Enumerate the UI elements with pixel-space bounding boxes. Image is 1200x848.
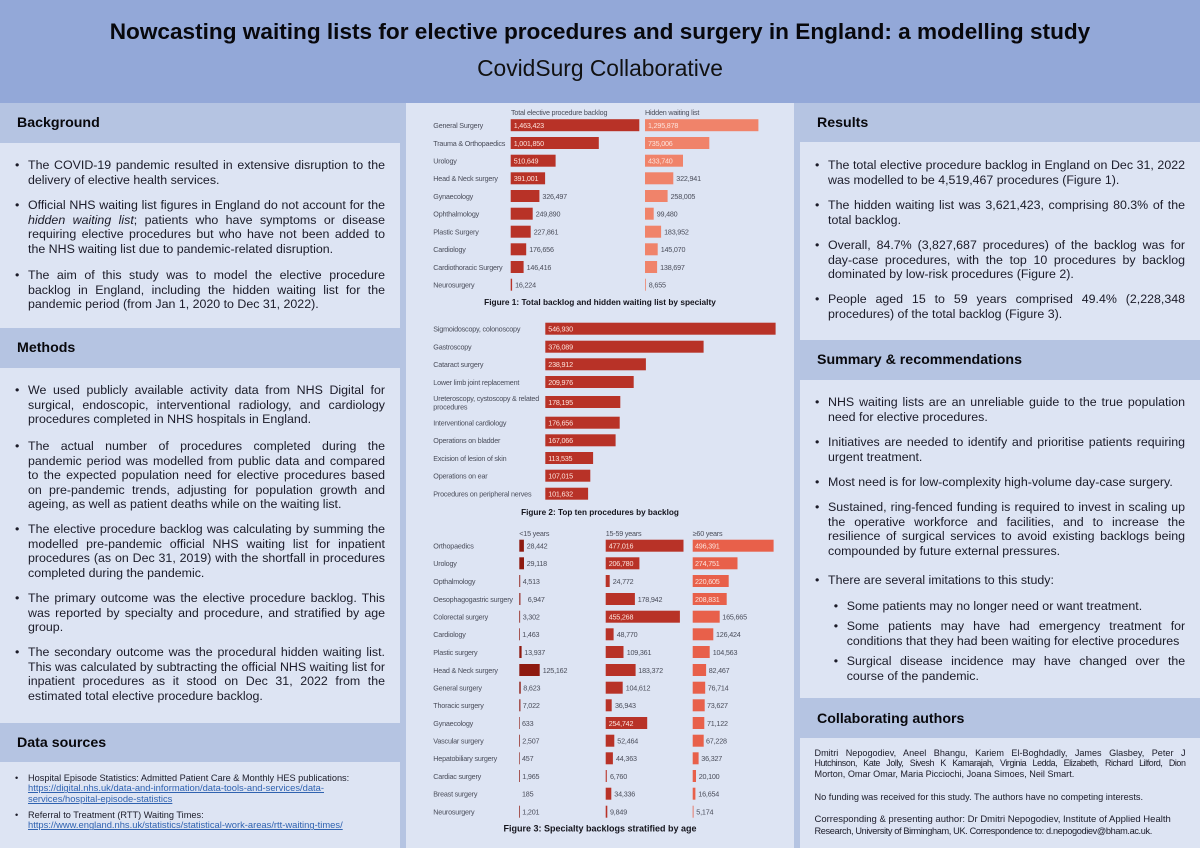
panel: Collaborating authors bbox=[800, 738, 1200, 848]
row: Gynaecology: Gynaecology bbox=[433, 719, 474, 728]
row: Ophthalmology: 99,480 bbox=[657, 210, 678, 218]
row: Cataract surgery: Cataract surgery bbox=[433, 360, 484, 369]
row: Operations on ear bbox=[433, 470, 590, 482]
row: Gynaecology: 258,005 bbox=[671, 192, 695, 201]
bullet: aim bbox=[28, 268, 385, 312]
row: Cardiac surgery: 1,965 bbox=[522, 772, 539, 781]
bullet: unreliable guide: need for elective procedures. bbox=[828, 410, 988, 424]
correspondence: Research, University of Birmingham, UK. Correspondence to: d.nepogodiev@bham.ac.uk. bbox=[814, 826, 1152, 836]
sub-bullet: emergency treatment bbox=[847, 619, 1185, 648]
bullet: backlog calculation: completed during the pandemic. bbox=[28, 566, 204, 580]
row: Operations on bladder: 167,066 bbox=[548, 436, 573, 445]
row: Procedures on peripheral nerves bbox=[433, 488, 588, 500]
row: Neurosurgery: 9,849 bbox=[610, 808, 627, 816]
row: Lower limb joint replacement bbox=[433, 376, 634, 388]
source: HES: https://digital.nhs.uk/data-and-information/data-tools-and-services/data- bbox=[28, 782, 324, 793]
bullet: primary outcome bbox=[28, 591, 385, 635]
row: Colorectal surgery: Colorectal surgery bbox=[433, 612, 489, 622]
bullet: day-case: dominated by low-risk procedures (Figure 2). bbox=[828, 267, 1074, 281]
bullet: backlog calculation: procedures (as on Dec 31, 2019) with the shortfall in procedures bbox=[28, 551, 385, 565]
Figure 1 chart: Hidden waiting list bbox=[645, 108, 699, 117]
sub-bullet: incidence bbox=[847, 654, 1185, 683]
row: General surgery: 104,612 bbox=[626, 684, 650, 692]
row: Gastroscopy bbox=[433, 341, 704, 353]
heading: Background: Background bbox=[17, 115, 100, 131]
panel: Summary & recommendations bbox=[800, 380, 1200, 698]
caption: Figure 3: Figure 3: Specialty backlogs stratified by age bbox=[503, 824, 697, 834]
row: Plastic Surgery: 227,861 bbox=[534, 228, 558, 236]
row: Opthalmology bbox=[433, 575, 729, 587]
subtitle: CovidSurg Collaborative bbox=[477, 55, 723, 81]
row: Operations on bladder bbox=[433, 434, 616, 446]
bullet: secondary outcome bbox=[28, 645, 385, 703]
row: Cardiology bbox=[433, 243, 685, 255]
row: Urology: 29,118 bbox=[527, 559, 547, 568]
row: Hepatobiliary surgery: Hepatobiliary surgery bbox=[433, 754, 498, 763]
row: Cardiology: Cardiology bbox=[433, 630, 466, 639]
row: Thoracic surgery: 36,943 bbox=[615, 701, 636, 710]
row: Cataract surgery bbox=[433, 358, 646, 370]
row: Gastroscopy: Gastroscopy bbox=[433, 342, 472, 352]
row: Cardiac surgery: 6,760 bbox=[610, 772, 627, 781]
row: Trauma & Orthopaedics: 1,001,850 bbox=[514, 139, 544, 148]
row: General surgery: 76,714 bbox=[708, 684, 729, 692]
bullet: data: We used publicly available activity data from NHS Digital for bbox=[28, 383, 385, 397]
row: Orthopaedics: 28,442 bbox=[527, 542, 548, 550]
row: Oesophagogastric surgery: 6,947 bbox=[528, 595, 545, 604]
row: Operations on ear: Operations on ear bbox=[433, 472, 488, 480]
row: Sigmoidoscopy: 546,930 bbox=[548, 324, 573, 334]
Figure 3 chart: <15 years bbox=[519, 529, 550, 538]
row: Procedures on peripheral nerves: Procedures on peripheral nerves bbox=[433, 490, 532, 498]
row: Ureteroscopy: 178,195 bbox=[548, 398, 573, 407]
row: Orthopaedics: 496,391 bbox=[695, 542, 720, 550]
bullet: hidden list bbox=[828, 198, 1185, 227]
row: Head & Neck surgery: 183,372 bbox=[638, 666, 663, 675]
row: Neurosurgery: 16,224 bbox=[515, 280, 536, 290]
sub-bullet: no longer need: Some patients may no longer need or want treatment. bbox=[847, 599, 1142, 613]
row: Urology: 510,649 bbox=[514, 156, 538, 166]
bullet: primary outcome: The primary outcome was the elective procedure backlog. This bbox=[28, 591, 385, 605]
bullet: hidden list: The hidden waiting list was 3,621,423, comprising 80.3% of the bbox=[828, 198, 1185, 212]
row: Operations on ear: 107,015 bbox=[548, 472, 573, 480]
row: Cardiology: 48,770 bbox=[617, 630, 638, 639]
row: Excision of lesion of skin bbox=[433, 452, 593, 464]
bullet: funding: Sustained, ring-fenced funding is required to invest in scaling up bbox=[828, 500, 1185, 514]
panel: Background bbox=[0, 143, 400, 328]
bullet: age: People aged 15 to 59 years comprised 49.4% (2,228,348 bbox=[828, 292, 1185, 306]
bullet: unreliable guide bbox=[828, 395, 1185, 424]
row: General surgery: 8,623 bbox=[523, 684, 540, 692]
row: Head & Neck surgery: Head & Neck surgery bbox=[433, 174, 498, 183]
row: Urology: Urology bbox=[433, 559, 457, 568]
row: Plastic surgery: 104,563 bbox=[713, 648, 737, 657]
row: Head & Neck surgery: Head & Neck surgery bbox=[433, 666, 498, 675]
row: Gynaecology bbox=[433, 717, 728, 729]
bullet: funding: the operative workforce and facilities, and to increase the bbox=[828, 515, 1185, 529]
row: Lower limb joint replacement: 209,976 bbox=[548, 378, 573, 387]
row: Cataract surgery: 238,912 bbox=[548, 360, 573, 369]
row: Interventional cardiology bbox=[433, 417, 620, 429]
row: Cardiology: 145,070 bbox=[661, 245, 685, 254]
heading: Methods: Methods bbox=[17, 340, 75, 356]
row: General Surgery: General Surgery bbox=[433, 121, 484, 130]
row: Opthalmology: 24,772 bbox=[613, 577, 634, 586]
bullet: modelling: to the expected population need for elective procedures based bbox=[28, 468, 385, 482]
caption: Figure 1: Figure 1: Total backlog and hidden waiting list by specialty bbox=[484, 297, 716, 307]
row: Plastic surgery bbox=[433, 646, 737, 658]
row: Sigmoidoscopy bbox=[433, 323, 776, 335]
Figure 3 chart: ≥60 years bbox=[693, 529, 723, 538]
bullet: data: surgical, endoscopic, interventional radiology, and cardiology bbox=[28, 398, 385, 412]
row: Breast surgery: 34,336 bbox=[614, 790, 635, 798]
bullet: aim: pandemic period (from Jan 1, 2020 to Dec 31, 2022). bbox=[28, 297, 319, 311]
bullet: backlog calculation: modelled pre-pandemic official NHS waiting list for inpatient bbox=[28, 537, 385, 551]
bullet: modelling: The actual number of procedures completed during the bbox=[28, 439, 385, 453]
bullet: funding: resilience of surgical services to avoid existing backlogs being bbox=[828, 529, 1185, 543]
row: Gynaecology: 326,497 bbox=[542, 192, 567, 201]
row: Urology bbox=[433, 155, 683, 167]
row: Cardiothoracic Surgery: 146,416 bbox=[527, 263, 551, 272]
author list: Dmitri Nepogodiev, Aneel Bhangu, Kariem El-Boghdadly, James Glasbey, Peter J bbox=[814, 748, 1186, 758]
row: Breast surgery: 16,654 bbox=[698, 790, 719, 798]
bullet: hidden waiting list: hidden waiting list; patients who have symptoms or disease bbox=[28, 213, 385, 227]
row: Ophthalmology: Ophthalmology bbox=[433, 210, 480, 218]
author list: Hutchinson, Kate Jolly, Sivesh K Kamarajah, Virginia Ledda, Elizabeth, Richard Lilford, Dion bbox=[814, 758, 1186, 768]
row: Head & Neck surgery: 82,467 bbox=[709, 666, 730, 675]
row: Urology: 433,740 bbox=[648, 156, 673, 166]
bullet: initiatives: Initiatives are needed to identify and prioritise patients requiring bbox=[828, 435, 1185, 449]
row: Hepatobiliary surgery bbox=[433, 752, 722, 764]
row: Plastic Surgery: Plastic Surgery bbox=[433, 228, 479, 236]
bullet: age: procedures) of the total backlog (Figure 3). bbox=[828, 307, 1062, 321]
heading: Data sources: Data sources bbox=[17, 735, 106, 751]
row: Plastic surgery: Plastic surgery bbox=[433, 648, 478, 657]
row: Excision of lesion of skin: Excision of lesion of skin bbox=[433, 454, 507, 463]
heading: Results: Results bbox=[817, 115, 868, 131]
bullet: total backlog: was modelled to be 4,519,467 procedures (Figure 1). bbox=[828, 173, 1119, 187]
panel: Results bbox=[800, 142, 1200, 340]
bullet: funding: compounded by future external pressures. bbox=[828, 544, 1060, 558]
row: Vascular surgery: 2,507 bbox=[522, 736, 539, 746]
Figure 2 chart bbox=[433, 323, 776, 517]
bullet: modelling: ageing, as well as patient deaths while on the waiting list. bbox=[28, 497, 341, 511]
row: Plastic surgery: 109,361 bbox=[627, 648, 651, 657]
row: Vascular surgery: Vascular surgery bbox=[433, 736, 484, 746]
bullet: day-case bbox=[828, 238, 1185, 282]
bullet: modelling: pandemic period was modelled from public data and compared bbox=[28, 454, 385, 468]
row: Neurosurgery bbox=[433, 279, 666, 291]
row: Thoracic surgery bbox=[433, 699, 728, 711]
bullet: disruption: delivery of elective health services. bbox=[28, 173, 219, 187]
bullet: hidden waiting list: requiring elective procedures but who have not been added to bbox=[28, 227, 385, 241]
bullet: hidden list: total backlog. bbox=[828, 213, 901, 227]
row: Colorectal surgery bbox=[433, 611, 747, 623]
row: Neurosurgery: 1,201 bbox=[522, 808, 539, 816]
correspondence bbox=[814, 814, 1171, 836]
row: Breast surgery: 185 bbox=[522, 790, 534, 798]
row: Neurosurgery: Neurosurgery bbox=[433, 808, 475, 816]
row: Thoracic surgery: 7,022 bbox=[523, 701, 540, 710]
row: Operations on bladder: Operations on bladder bbox=[433, 436, 501, 445]
row: Urology: Urology bbox=[433, 156, 457, 166]
row: Colorectal surgery: 3,302 bbox=[523, 612, 540, 622]
bullet: initiatives bbox=[828, 435, 1185, 464]
row: Urology bbox=[433, 557, 738, 569]
bullet: hidden waiting list: Official NHS waiting list figures in England do not account for the bbox=[28, 198, 385, 212]
row: General Surgery bbox=[433, 119, 758, 131]
bullet: primary outcome: group. bbox=[28, 620, 63, 634]
row: Neurosurgery: 8,655 bbox=[649, 280, 666, 290]
row: Cardiology bbox=[433, 628, 741, 640]
row: Orthopaedics: Orthopaedics bbox=[433, 542, 474, 550]
row: Gynaecology bbox=[433, 190, 695, 202]
row: Neurosurgery: Neurosurgery bbox=[433, 280, 475, 290]
row: General Surgery: 1,463,423 bbox=[514, 121, 544, 130]
row: Head & Neck surgery bbox=[433, 172, 701, 184]
bullet: modelling: on pre-pandemic trends, adjusting for population growth and bbox=[28, 483, 385, 497]
row: Plastic surgery: 13,937 bbox=[524, 648, 545, 657]
bullet: secondary outcome: This was calculated by subtracting the official NHS waiting list for bbox=[28, 660, 385, 674]
Figure 1 chart bbox=[433, 108, 758, 307]
funding statement: No funding was received for this study. The authors have no competing interests. bbox=[814, 792, 1143, 802]
row: Oesophagogastric surgery: 208,831 bbox=[695, 595, 720, 604]
row: Ureteroscopy bbox=[433, 394, 620, 411]
row: Vascular surgery bbox=[433, 735, 727, 747]
row: Opthalmology: Opthalmology bbox=[433, 577, 476, 586]
row: Trauma & Orthopaedics: Trauma & Orthopaedics bbox=[433, 139, 506, 148]
Figure 3 chart bbox=[433, 529, 774, 834]
source: RTT: Referral to Treatment (RTT) Waiting Times: bbox=[28, 810, 204, 820]
row: Gynaecology: 71,122 bbox=[707, 719, 728, 728]
bullet: disruption bbox=[28, 158, 385, 187]
row: Lower limb joint replacement: Lower limb joint replacement bbox=[433, 378, 519, 387]
row: General Surgery: 1,295,878 bbox=[648, 121, 678, 130]
row: Gastroscopy: 376,089 bbox=[548, 342, 573, 352]
bullet: secondary outcome: The secondary outcome was the procedural hidden waiting list. bbox=[28, 645, 385, 659]
row: Cardiothoracic Surgery: 138,697 bbox=[660, 263, 685, 272]
source: RTT: https://www.england.nhs.uk/statistics/statistical-work-areas/rtt-waiting-times/ bbox=[28, 819, 343, 830]
row: Interventional cardiology: Interventional cardiology bbox=[433, 418, 507, 428]
row: Neurosurgery bbox=[433, 806, 713, 818]
bullet: funding bbox=[828, 500, 1185, 558]
row: Orthopaedics: 477,016 bbox=[609, 542, 633, 550]
row: Plastic Surgery bbox=[433, 226, 689, 238]
author list: Morton, Omar Omar, Maria Picciochi, Joana Simoes, Neil Smart. bbox=[814, 768, 1074, 778]
sub-bullet: emergency treatment: conditions that they had been waiting for elective procedures bbox=[847, 634, 1179, 648]
bullet: aim: The aim of this study was to model the elective procedure bbox=[28, 268, 385, 282]
row: Ureteroscopy: Ureteroscopy, cystoscopy & related bbox=[433, 394, 539, 403]
row: Opthalmology: 4,513 bbox=[523, 577, 540, 586]
sub-bullet: emergency treatment: Some patients may have had emergency treatment for bbox=[847, 619, 1185, 633]
row: General surgery: General surgery bbox=[433, 684, 482, 692]
source: HES: services/hospital-episode-statistics bbox=[28, 793, 172, 804]
row: Head & Neck surgery bbox=[433, 664, 730, 676]
bullet: secondary outcome: estimated total elective procedure backlog. bbox=[28, 689, 263, 703]
row: Sigmoidoscopy: Sigmoidoscopy, colonoscopy bbox=[433, 324, 521, 334]
row: Oesophagogastric surgery: 178,942 bbox=[638, 595, 662, 604]
header band bbox=[0, 0, 1200, 103]
row: Interventional cardiology: 176,656 bbox=[548, 418, 573, 428]
bullet: age bbox=[828, 292, 1185, 321]
bullet: data: procedures completed in NHS hospitals in England. bbox=[28, 412, 311, 426]
row: Thoracic surgery: 73,627 bbox=[707, 701, 728, 710]
bullet: aim: backlog in England, including the hidden waiting list for the bbox=[28, 283, 385, 297]
row: Gynaecology: 254,742 bbox=[609, 719, 633, 728]
row: Orthopaedics bbox=[433, 540, 774, 552]
panel: Methods bbox=[0, 368, 400, 723]
row: Head & Neck surgery: 322,941 bbox=[676, 174, 701, 183]
row: Breast surgery bbox=[433, 788, 719, 800]
row: Hepatobiliary surgery: 36,327 bbox=[701, 754, 722, 763]
sub-bullet: incidence: course of the pandemic. bbox=[847, 669, 979, 683]
caption: Figure 2: Figure 2: Top ten procedures by backlog bbox=[521, 508, 679, 517]
row: Opthalmology: 220,605 bbox=[695, 577, 720, 586]
row: Cardiac surgery: Cardiac surgery bbox=[433, 772, 482, 781]
bullet: backlog calculation bbox=[28, 522, 385, 580]
bullet: secondary outcome: inpatient procedures as it stood on Dec 31, 2022 from the bbox=[28, 674, 385, 688]
row: Cardiology: 176,656 bbox=[529, 245, 554, 254]
panel: Data sources: • bbox=[15, 810, 18, 820]
row: Cardiothoracic Surgery bbox=[433, 261, 685, 273]
bullet: modelling bbox=[28, 439, 385, 512]
panel: Data sources: • bbox=[15, 772, 18, 782]
row: Plastic Surgery: 183,952 bbox=[664, 228, 689, 236]
row: Oesophagogastric surgery bbox=[433, 593, 727, 605]
bullet: initiatives: urgent treatment. bbox=[828, 450, 922, 464]
row: Hepatobiliary surgery: 44,363 bbox=[616, 754, 637, 763]
row: Colorectal surgery: 455,268 bbox=[609, 612, 633, 622]
row: Excision of lesion of skin: 113,535 bbox=[548, 454, 573, 463]
row: Cardiac surgery bbox=[433, 770, 720, 782]
row: Cardiology: Cardiology bbox=[433, 245, 466, 254]
bullet: total backlog bbox=[828, 158, 1185, 187]
Figure 3 chart: 15-59 years bbox=[606, 529, 642, 538]
row: Oesophagogastric surgery: Oesophagogastric surgery bbox=[433, 595, 513, 604]
row: Cardiothoracic Surgery: Cardiothoracic Surgery bbox=[433, 263, 503, 272]
row: Gynaecology: Gynaecology bbox=[433, 192, 474, 201]
correspondence: Corresponding & presenting author: Dr Dmitri Nepogodiev, Institute of Applied Health bbox=[814, 814, 1171, 825]
row: Neurosurgery: 5,174 bbox=[696, 808, 713, 816]
row: Vascular surgery: 67,228 bbox=[706, 736, 727, 746]
row: General surgery bbox=[433, 682, 729, 694]
row: Cardiology: 1,463 bbox=[522, 630, 539, 639]
bullet: most need: Most need is for low-complexity high-volume day-case surgery. bbox=[828, 475, 1173, 489]
row: Head & Neck surgery: 125,162 bbox=[543, 666, 567, 675]
heading: Collaborating authors: Collaborating authors bbox=[817, 711, 964, 727]
row: Trauma & Orthopaedics bbox=[433, 137, 709, 149]
Figure 1 chart: Total elective procedure backlog bbox=[511, 108, 607, 117]
bullet: day-case: day-case procedures, with the top 10 procedures by backlog bbox=[828, 253, 1185, 267]
bullet: data bbox=[28, 383, 385, 427]
bullet: total backlog: The total elective procedure backlog in England on Dec 31, 2022 bbox=[828, 158, 1185, 172]
source: HES bbox=[15, 772, 349, 804]
bullet: day-case: Overall, 84.7% (3,827,687 procedures) of the backlog was for bbox=[828, 238, 1185, 252]
bullet: limitations: There are several imitations to this study: bbox=[828, 573, 1054, 587]
row: Colorectal surgery: 165,665 bbox=[722, 612, 747, 622]
heading: Summary & recommendations: Summary & recommendations bbox=[817, 352, 1022, 368]
bullet: primary outcome: was reported by specialty and procedure, and stratified by age bbox=[28, 606, 385, 620]
row: Ophthalmology: 249,890 bbox=[536, 210, 560, 218]
author list bbox=[814, 748, 1186, 778]
bullet: unreliable guide: NHS waiting lists are an unreliable guide to the true population bbox=[828, 395, 1185, 409]
row: Ureteroscopy: procedures bbox=[433, 402, 468, 411]
row: Urology: 274,751 bbox=[695, 559, 720, 568]
bullet: hidden waiting list: the NHS waiting list due to pandemic-related disruption. bbox=[28, 242, 333, 256]
panel: Data sources bbox=[0, 762, 400, 848]
panel: figures bbox=[406, 103, 794, 848]
sub-bullet: incidence: Surgical disease incidence may have changed over the bbox=[847, 654, 1185, 668]
row: Cardiology: 126,424 bbox=[716, 630, 741, 639]
source: RTT bbox=[15, 810, 343, 830]
bullet: disruption: The COVID-19 pandemic resulted in extensive disruption to the bbox=[28, 158, 385, 172]
row: Gynaecology: 633 bbox=[522, 719, 534, 728]
row: Cardiac surgery: 20,100 bbox=[699, 772, 720, 781]
row: Thoracic surgery: Thoracic surgery bbox=[433, 701, 484, 710]
row: Hepatobiliary surgery: 457 bbox=[522, 754, 534, 763]
row: Breast surgery: Breast surgery bbox=[433, 790, 478, 798]
row: Trauma & Orthopaedics: 735,006 bbox=[648, 139, 673, 148]
row: Ophthalmology bbox=[433, 208, 678, 220]
source: HES: Hospital Episode Statistics: Admitted Patient Care & Monthly HES publications: bbox=[28, 772, 349, 782]
row: Procedures on peripheral nerves: 101,632 bbox=[548, 490, 573, 498]
bullet: hidden waiting list bbox=[28, 198, 385, 256]
bullet: backlog calculation: The elective procedure backlog was calculating by summing the bbox=[28, 522, 385, 536]
row: Vascular surgery: 52,464 bbox=[617, 736, 638, 746]
title: Nowcasting waiting lists for elective procedures and surgery in England: a modelling study bbox=[110, 19, 1090, 44]
row: Head & Neck surgery: 391,001 bbox=[514, 174, 538, 183]
row: Urology: 206,780 bbox=[609, 559, 633, 568]
